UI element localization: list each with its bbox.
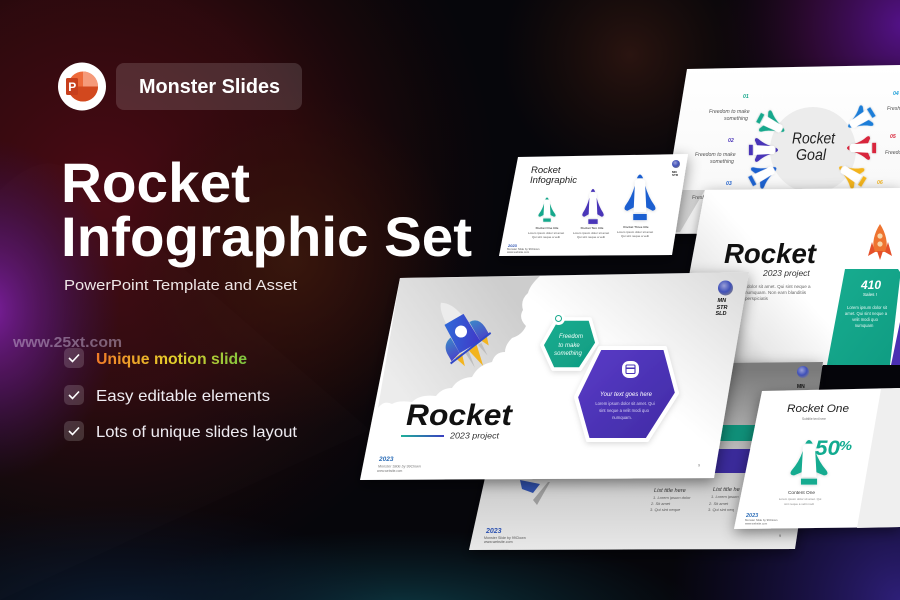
footer: 9 <box>779 534 781 538</box>
rocket captions: Lorem ipsum dolor sit amet <box>617 230 653 234</box>
list columns: 3. Qui sint neq <box>708 507 735 512</box>
underline <box>401 435 444 437</box>
slide: Rocket main <box>360 272 749 480</box>
logo: STR <box>672 173 679 177</box>
brand: PowerPoint icon <box>58 62 106 110</box>
labels left: Freedom to make <box>695 152 736 158</box>
rocket illustration <box>422 289 503 380</box>
footer <box>745 513 778 526</box>
feature: easy editable elements <box>64 385 270 405</box>
labels right: 06 <box>877 180 883 186</box>
logo: MN <box>718 298 727 304</box>
labels left: 03 <box>726 181 732 187</box>
heading: Infographic <box>530 175 577 186</box>
logo <box>672 160 680 177</box>
center circle: Rocket <box>792 130 835 148</box>
footer: www.website.com <box>484 540 513 544</box>
rocket purple <box>582 189 604 224</box>
logo: SLD <box>716 311 727 317</box>
hexagon: your text: Lorem ipsum dolor sit amet. Qui <box>595 401 655 406</box>
rocket captions: Lorem ipsum dolor sit amet <box>573 231 609 235</box>
footer <box>377 456 700 473</box>
rocket fragment <box>520 480 550 505</box>
card purple <box>891 322 900 365</box>
footer <box>507 243 540 254</box>
rocket captions: Qui sint neque a velit <box>532 235 560 239</box>
heading: Rocket <box>724 238 818 269</box>
content body: Lorem ipsum dolor sit amet. Qui <box>779 497 822 501</box>
feature: lots of unique slides layout: Lots of unique slides layout <box>96 424 298 441</box>
center circle: Goal <box>796 147 826 164</box>
paragraph: numquam. Non earn blanditiis <box>745 290 807 295</box>
heading <box>530 165 577 186</box>
list columns <box>650 487 740 512</box>
card teal: Sales ! <box>863 292 877 297</box>
subheading: 2023 project <box>449 430 500 440</box>
rocket icon orange <box>868 224 892 260</box>
feature: unique motion slide <box>64 348 247 368</box>
rocket captions: Lorem ipsum dolor sit amet <box>528 231 564 235</box>
rocket 04 <box>842 101 879 137</box>
title: Rocket <box>61 151 250 214</box>
slide: list <box>469 362 823 550</box>
hexagon: freedom: Freedom <box>559 334 583 340</box>
hexagon: your text: numquam. <box>612 415 632 420</box>
heading: Rocket <box>531 165 561 176</box>
title: Infographic Set <box>61 205 472 268</box>
paragraph: perspiciatis <box>745 296 769 301</box>
labels right: 05 <box>890 134 896 140</box>
feature: unique motion slide: Unique motion slide <box>96 351 247 368</box>
rocket captions <box>528 225 653 239</box>
center circle <box>770 107 856 193</box>
logo: MN <box>672 170 677 174</box>
hexagon: your text: Your text goes here <box>600 392 653 398</box>
list columns: 1. Lorem ipsum dolor <box>653 495 691 500</box>
brand: Monster Slides pill <box>116 63 302 110</box>
list columns: 2. Sit amet <box>650 501 671 506</box>
labels right <box>877 91 900 186</box>
rocket green <box>538 198 556 222</box>
heading: Rocket <box>406 399 514 432</box>
footer: 2023 <box>507 243 518 248</box>
rocket 01 <box>753 107 790 142</box>
footer: www.website.com <box>745 522 768 526</box>
rocket captions: Rocket Two title <box>581 226 604 230</box>
paragraph <box>745 284 811 301</box>
labels left: something <box>710 159 734 165</box>
card teal: amet. Qui sint neque a <box>845 311 888 316</box>
content body: sint neque a velit modi <box>784 502 814 506</box>
slide: Rocket 410 <box>672 188 900 367</box>
footer: Monster Slide by 99Clown <box>745 518 778 522</box>
footer: www.website.com <box>377 469 403 473</box>
content body <box>779 497 822 506</box>
brand: PowerPoint icon: P <box>68 80 76 94</box>
hexagon: your text: sint neque a velit modi quo <box>599 408 650 413</box>
rocket captions: Qui sint neque a velit <box>577 235 605 239</box>
footer: 2023 <box>745 513 758 519</box>
labels left: Freedom to make <box>709 109 750 115</box>
watermark: www.25xt.com <box>12 335 122 351</box>
footer: 2023 <box>485 528 502 535</box>
side panel <box>857 388 900 528</box>
labels left: Fresh <box>692 195 705 201</box>
card teal: numquam <box>855 323 874 328</box>
black gap <box>823 365 900 393</box>
hexagon: freedom: something <box>554 351 583 357</box>
rocket blue <box>625 174 655 220</box>
rocket captions: Rocket Three title <box>623 225 649 229</box>
labels left: 02 <box>728 138 734 144</box>
slide: Rocket One <box>734 388 900 529</box>
subheading: Subtitle text here <box>802 417 826 421</box>
feature: easy editable elements: Easy editable elements <box>96 388 270 405</box>
slide: Rocket Infographic <box>499 154 688 256</box>
hexagon: freedom <box>542 312 597 369</box>
slide: Rocket Goal <box>660 65 900 234</box>
footer: 2023 <box>378 456 394 463</box>
brand: Monster Slides pill: Monster Slides <box>139 76 280 98</box>
band teal <box>712 425 760 441</box>
footer <box>484 528 781 544</box>
logo <box>797 366 809 390</box>
footer: www.website.com <box>507 250 530 254</box>
percent: % <box>839 438 852 453</box>
card teal: Lorem ipsum dolor sit <box>847 305 888 310</box>
feature list <box>64 348 298 441</box>
heading: Rocket One <box>787 403 849 415</box>
footer: Monster Slide by 99Clown <box>507 247 540 251</box>
subtitle: PowerPoint Template and Asset <box>64 277 298 294</box>
list columns: List title here <box>654 488 686 494</box>
band purple <box>708 449 760 473</box>
hexagon: freedom: to make <box>558 343 580 349</box>
rocket teal <box>791 440 827 485</box>
subheading: 2023 project <box>762 268 810 278</box>
list columns: List title he <box>713 487 740 493</box>
footer: 9 <box>698 464 700 468</box>
list columns: 2. Sit amet <box>708 501 729 506</box>
footer: Monster Slide by 99Clown <box>378 464 421 468</box>
labels right: Fresh <box>887 106 900 112</box>
card teal: velit modi quo <box>852 317 879 322</box>
labels left <box>692 94 750 201</box>
labels left: 01 <box>743 94 749 100</box>
card teal <box>827 269 900 365</box>
content caption: Content One <box>788 490 815 495</box>
rocket captions: Qui sint neque a velit <box>621 234 649 238</box>
title <box>61 151 472 268</box>
rocket 03 <box>745 157 782 192</box>
percent <box>815 437 852 460</box>
labels right: 04 <box>893 91 899 97</box>
labels left: something <box>724 116 748 122</box>
rocket 02 <box>749 138 778 162</box>
card teal: 410 <box>860 278 881 292</box>
logo: MN <box>797 384 805 390</box>
logo: STR <box>716 305 728 311</box>
hexagon: your text <box>576 348 677 440</box>
paragraph: dolor sit amet. Qui sint neque a <box>747 284 811 289</box>
rocket 05 <box>847 136 876 160</box>
list columns: 1. Lorem ipsum <box>711 494 739 499</box>
list columns: 3. Qui sint neque <box>650 507 681 512</box>
logo <box>716 280 733 317</box>
percent: 50 <box>815 437 840 460</box>
footer: Monster Slide by 99Clown <box>484 536 526 540</box>
rocket 06 <box>833 157 870 193</box>
rocket captions: Rocket One title <box>536 226 559 230</box>
cloud area <box>378 276 540 408</box>
